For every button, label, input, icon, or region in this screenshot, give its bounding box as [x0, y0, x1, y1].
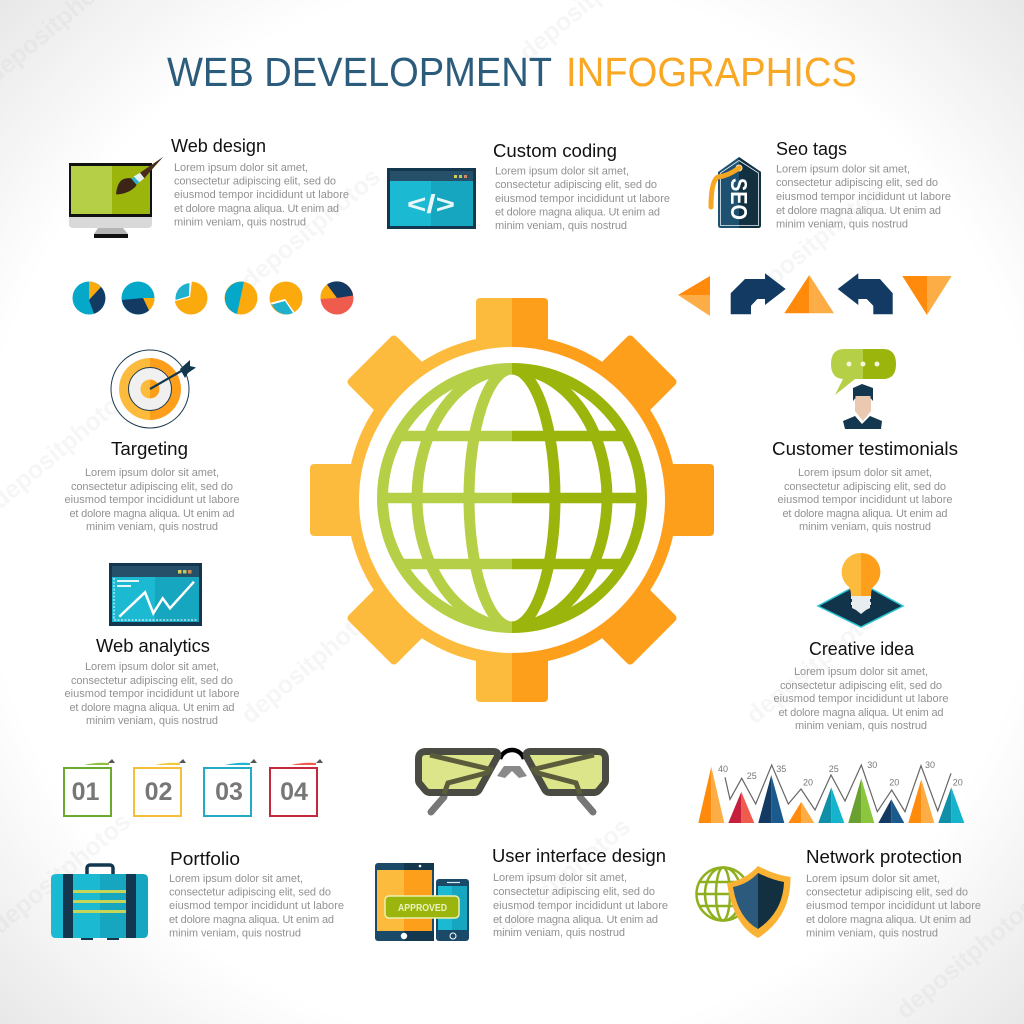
text block: et dolore magna aliqua. Ut enim ad [70, 702, 234, 714]
panel: custom coding [387, 140, 670, 232]
text block [169, 873, 344, 940]
text block: consectetur adipiscing elit, sed do [806, 886, 968, 898]
heading: Web analytics [96, 635, 210, 656]
bar: 35 navy [758, 775, 784, 823]
bar: 20 orange [788, 802, 814, 823]
bar: 20 teal [938, 787, 964, 823]
text block: et dolore magna aliqua. Ut enim ad [169, 914, 334, 926]
text: depositphotos [491, 384, 641, 517]
box 04 [270, 759, 323, 816]
text block: Lorem ipsum dolor sit amet, [806, 873, 940, 885]
heading: Targeting [111, 438, 188, 459]
icon: globe and shield [696, 866, 791, 938]
text block [493, 872, 668, 939]
text block: minim veniam, quis nostrud [86, 715, 218, 727]
pie chart 1 [72, 282, 106, 314]
pie chart 3 [172, 280, 208, 314]
box 03 [204, 759, 257, 816]
title: WEB DEVELOPMENT [167, 49, 552, 95]
line chart [725, 765, 951, 812]
text block: et dolore magna aliqua. Ut enim ad [806, 914, 971, 926]
text block: eiusmod tempor incididunt ut labore [495, 193, 670, 205]
text block: consectetur adipiscing elit, sed do [71, 481, 233, 493]
text block [495, 166, 670, 232]
text block: Lorem ipsum dolor sit amet, [798, 467, 932, 479]
text block: minim veniam, quis nostrud [86, 521, 218, 533]
icon: speech bubble and person [831, 349, 896, 429]
box 01: 01 [72, 778, 99, 806]
text: depositphotos [486, 812, 636, 945]
panel: customer testimonials [772, 349, 958, 533]
text block: eiusmod tempor incididunt ut labore [806, 900, 981, 912]
value labels: 35 [776, 764, 786, 774]
icon: code window: </> [407, 189, 455, 219]
text: depositphotos [738, 177, 888, 310]
icon: suitcase [51, 865, 148, 940]
text: depositphotos [236, 597, 386, 730]
box 04: 04 [280, 778, 308, 806]
text block: Lorem ipsum dolor sit amet, [169, 873, 303, 885]
icon: analytics window [109, 563, 202, 626]
pie chart 6 [320, 281, 354, 314]
pie chart 4 [224, 282, 258, 314]
bar: 25 teal [818, 787, 844, 823]
bar: 40 orange [698, 767, 724, 823]
bar: 25 red [728, 792, 754, 823]
numbered boxes [64, 759, 323, 816]
icon: seo tag: SEO [726, 178, 752, 220]
panel: seo tags [711, 138, 951, 230]
text block: minim veniam, quis nostrud [799, 521, 931, 533]
text: depositphotos [236, 162, 386, 295]
text block: et dolore magna aliqua. Ut enim ad [776, 205, 941, 217]
text block [174, 162, 349, 228]
heading: Web design [171, 135, 266, 156]
panel: creative idea [774, 553, 948, 732]
text: depositphotos [741, 597, 891, 730]
panel: web analytics [64, 563, 240, 727]
text block: et dolore magna aliqua. Ut enim ad [493, 914, 658, 926]
pie chart 5 [270, 282, 302, 315]
icon: down triangle [902, 276, 952, 315]
value labels: 20 [803, 778, 813, 788]
box 03: 03 [215, 778, 243, 806]
icon: seo tag [711, 157, 761, 228]
text block: et dolore magna aliqua. Ut enim ad [70, 508, 234, 520]
text block: eiusmod tempor incididunt ut labore [493, 900, 668, 912]
icon: arrow left [838, 273, 893, 314]
text block: et dolore magna aliqua. Ut enim ad [174, 203, 339, 215]
icon: left triangle [678, 276, 710, 316]
text block: minim veniam, quis nostrud [495, 220, 627, 232]
text block: consectetur adipiscing elit, sed do [71, 675, 233, 687]
text block: Lorem ipsum dolor sit amet, [493, 872, 627, 884]
title: INFOGRAPHICS [566, 49, 857, 95]
value labels: 30 [867, 760, 877, 770]
text block: consectetur adipiscing elit, sed do [776, 177, 938, 189]
bar: 30 green [848, 778, 874, 823]
text block: Lorem ipsum dolor sit amet, [85, 467, 219, 479]
triangle bar chart [698, 760, 964, 823]
text block [776, 164, 951, 230]
panel: network protection [696, 846, 981, 940]
value labels [718, 760, 963, 788]
text block: eiusmod tempor incididunt ut labore [64, 494, 240, 506]
value labels: 40 [718, 764, 728, 774]
text block [778, 467, 952, 533]
text block: consectetur adipiscing elit, sed do [495, 179, 657, 191]
icon: tablet and phone with approved badge: APPROVED [398, 903, 447, 914]
heading: Network protection [806, 846, 962, 867]
text block: Lorem ipsum dolor sit amet, [776, 164, 910, 176]
box 02: 02 [145, 778, 172, 806]
value labels: 30 [925, 760, 935, 770]
value labels: 20 [953, 778, 963, 788]
title [167, 49, 857, 95]
text block: consectetur adipiscing elit, sed do [784, 481, 946, 493]
icon: light bulb on diamond [818, 553, 903, 627]
pie chart 2 [122, 282, 155, 314]
text block [64, 661, 240, 727]
value labels: 20 [889, 778, 899, 788]
icon: gear [310, 298, 714, 702]
icon: arrow right [731, 273, 786, 314]
panel: portfolio [51, 848, 344, 940]
value labels: 25 [829, 764, 839, 774]
text block: Lorem ipsum dolor sit amet, [174, 162, 308, 174]
bar: 30 orange [908, 779, 934, 823]
text block: et dolore magna aliqua. Ut enim ad [495, 206, 660, 218]
panel: user interface design [375, 845, 668, 941]
text block: consectetur adipiscing elit, sed do [174, 176, 336, 188]
text block: Lorem ipsum dolor sit amet, [495, 166, 629, 178]
text block: eiusmod tempor incididunt ut labore [774, 693, 948, 705]
text block: eiusmod tempor incididunt ut labore [776, 191, 951, 203]
pie charts row [72, 280, 354, 315]
text block [806, 873, 981, 940]
text block [64, 467, 240, 533]
text block: et dolore magna aliqua. Ut enim ad [782, 508, 948, 520]
text block: consectetur adipiscing elit, sed do [780, 680, 942, 692]
text block [774, 666, 948, 732]
text block: eiusmod tempor incididunt ut labore [778, 494, 952, 506]
text block: minim veniam, quis nostrud [776, 218, 908, 230]
heading: Custom coding [493, 140, 617, 161]
icon: globe [382, 368, 642, 628]
text block: Lorem ipsum dolor sit amet, [85, 661, 219, 673]
icon: target with arrow [111, 350, 196, 428]
icon: 3d glasses [418, 750, 606, 812]
arrows and triangles row [678, 273, 952, 316]
bar: 20 navy [878, 799, 904, 823]
heading: Seo tags [776, 138, 847, 159]
icon: monitor with paint brush [69, 157, 163, 238]
box 02 [134, 759, 186, 816]
heading: User interface design [492, 845, 666, 866]
text block: consectetur adipiscing elit, sed do [493, 886, 655, 898]
text block: et dolore magna aliqua. Ut enim ad [778, 707, 944, 719]
text block: minim veniam, quis nostrud [806, 928, 938, 940]
icon: code window [387, 168, 476, 229]
panel: web design [69, 135, 349, 238]
central gear with globe [310, 298, 714, 702]
heading: Portfolio [170, 848, 240, 869]
text block: minim veniam, quis nostrud [169, 928, 301, 940]
box 01 [64, 759, 115, 816]
icon: up triangle [784, 275, 834, 313]
text block: consectetur adipiscing elit, sed do [169, 886, 331, 898]
text block: minim veniam, quis nostrud [493, 927, 625, 939]
text block: eiusmod tempor incididunt ut labore [169, 900, 344, 912]
heading: Customer testimonials [772, 438, 958, 459]
text block: eiusmod tempor incididunt ut labore [174, 189, 349, 201]
text block: minim veniam, quis nostrud [795, 720, 927, 732]
text block: Lorem ipsum dolor sit amet, [794, 666, 928, 678]
value labels: 25 [747, 771, 757, 781]
panel: targeting [64, 350, 240, 533]
text block: minim veniam, quis nostrud [174, 216, 306, 228]
icon: tablet and phone with approved badge [375, 863, 469, 941]
heading: Creative idea [809, 638, 915, 659]
text block: eiusmod tempor incididunt ut labore [64, 688, 240, 700]
